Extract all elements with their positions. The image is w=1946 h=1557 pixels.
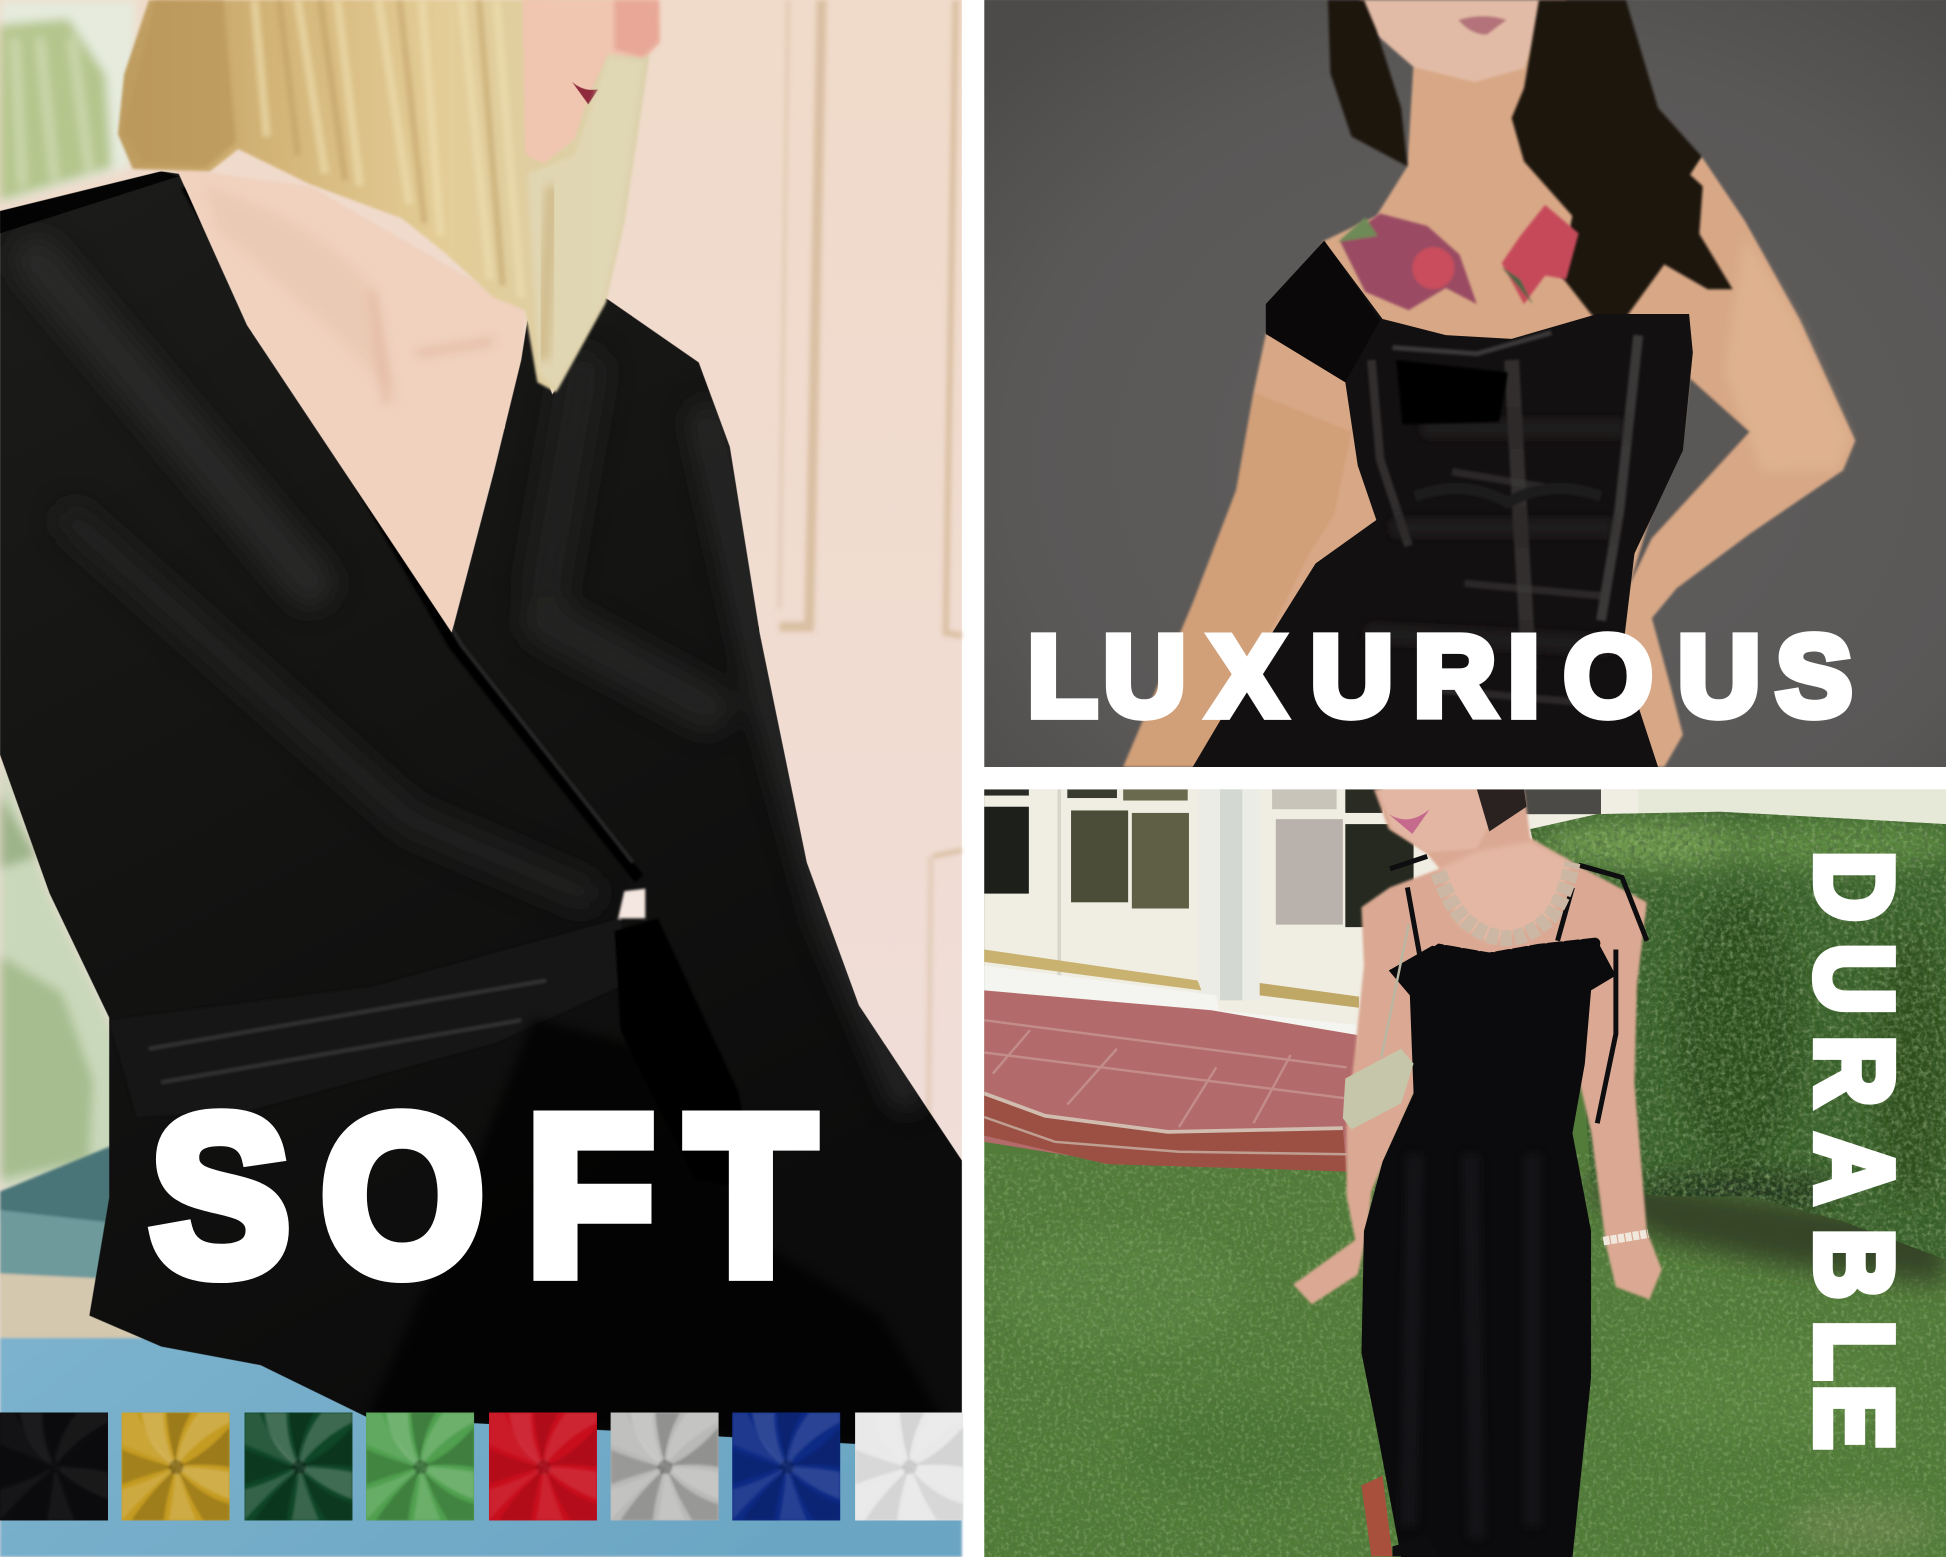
panel: luxurious photo [984,0,1946,767]
figure: black velvet robe [0,171,962,1450]
girl: silver clutch bag [1343,925,1414,1129]
palm leaves lower [0,751,143,1191]
girl: sandal [1361,1476,1392,1556]
gray gap behind arm [1628,377,1750,588]
girl: pearl necklace [1438,863,1572,938]
brick step [984,990,1358,1172]
face [522,0,659,164]
fabric colour swatches [0,1412,963,1520]
woman: skin [1123,0,1855,767]
swatch: red [489,1412,597,1520]
palm leaves upper [0,0,137,205]
velvet sheen [37,186,962,1450]
woman: rose tattoos [1338,205,1579,310]
bed pillow and sheet [0,1136,962,1557]
robe belt [109,889,757,1191]
girl: pearl bracelet [1603,1234,1648,1241]
swatch: royal blue [732,1412,840,1520]
woman: dark hair [1328,0,1733,344]
dress straps [1390,856,1647,1123]
girl: skin [1293,789,1662,1304]
panel: durable photo [984,789,1946,1557]
swatch: light green [366,1412,474,1520]
heading: luxurious: LUXURIOUS [1028,614,1852,741]
figure: blonde hair [118,0,659,392]
lawn mottling [1790,1496,1934,1557]
girl: black dress [1361,856,1647,1557]
hedge and mulch [1527,807,1946,1285]
figure: neck and chest skin [174,0,659,635]
swatch: gold [122,1412,230,1520]
robe lower shading [367,1018,962,1450]
french doors and windows [984,789,1601,1035]
heading: durable: DURABLE [1794,851,1915,1450]
door panelling [779,0,962,1142]
house wall [984,789,1679,1050]
swatch: black [0,1412,108,1520]
swatch: silver [611,1412,719,1520]
swatch: dark green [244,1412,352,1520]
woman: black bustier [1193,241,1693,767]
swatch: white [855,1412,963,1520]
heading: soft: SOFT [150,1070,815,1322]
